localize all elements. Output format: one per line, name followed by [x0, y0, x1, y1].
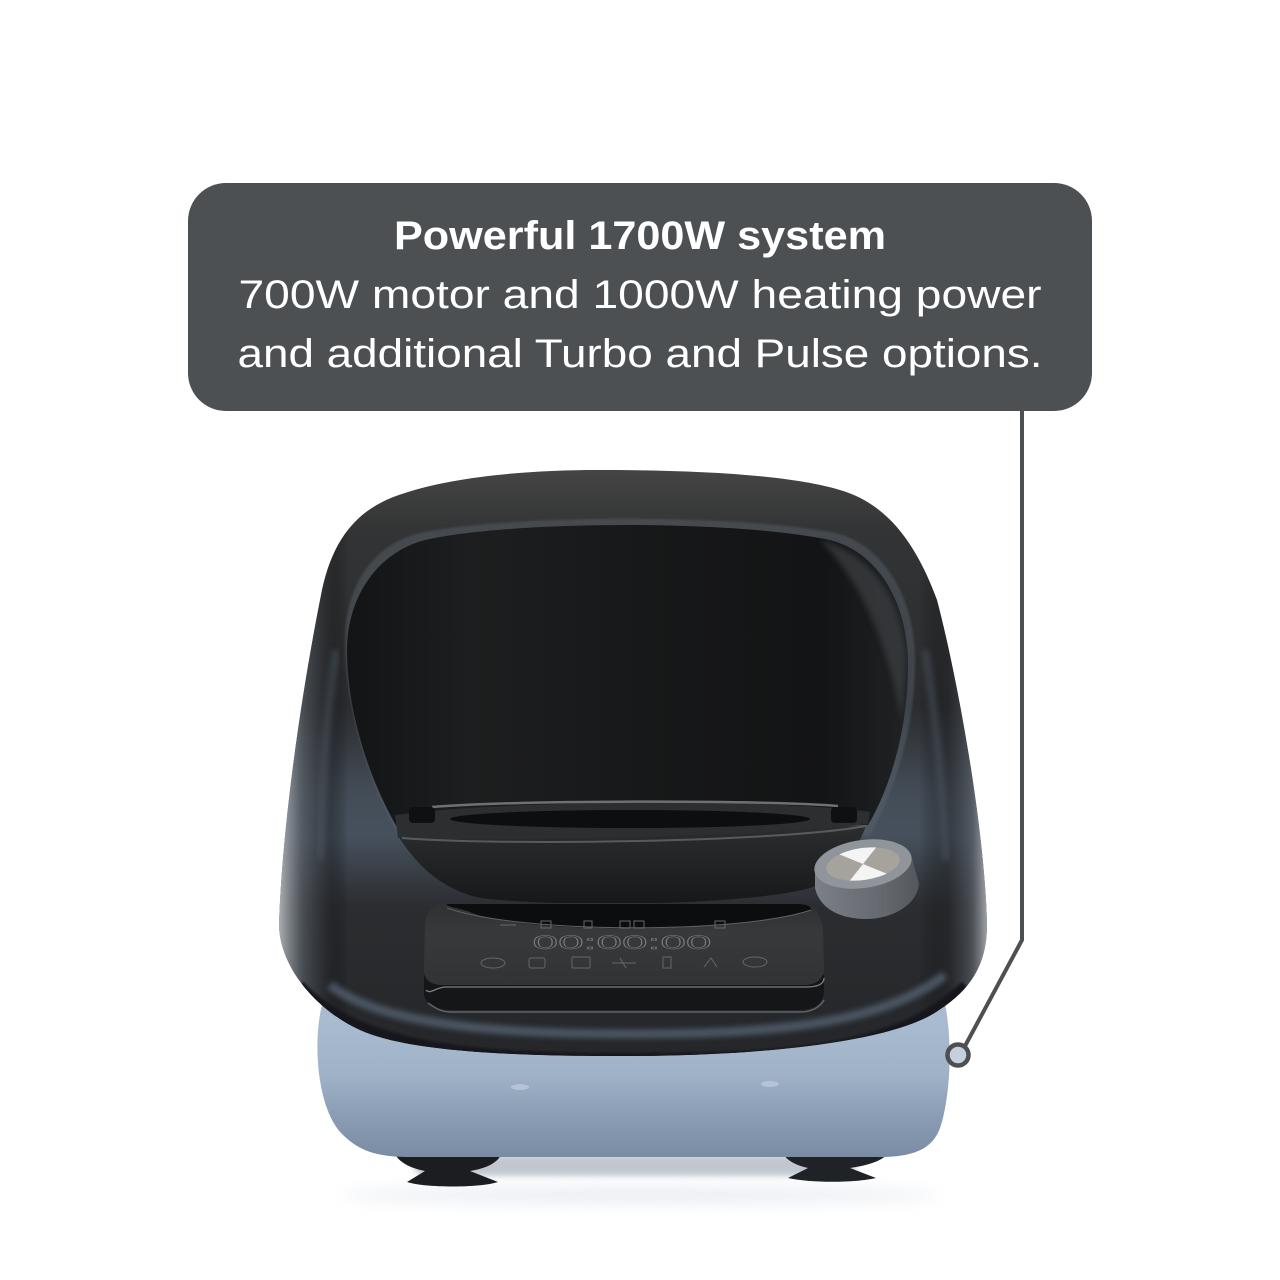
- back cavity: [347, 525, 908, 840]
- underside shadow: [405, 1155, 865, 1176]
- selector knob: [811, 833, 919, 919]
- callout connector line: [948, 411, 1022, 1066]
- product photo: soup maker: [270, 465, 995, 1202]
- heading: Powerful 1700W system: [394, 214, 886, 258]
- body text line 2: and additional Turbo and Pulse options.: [238, 332, 1042, 376]
- timer display: 00:00:00: [532, 933, 712, 954]
- control panel: [424, 903, 824, 1012]
- icon: right foot: [781, 1150, 890, 1182]
- floor shadow: [340, 1188, 940, 1202]
- dark upper shell: [270, 465, 995, 1065]
- icon: left foot: [393, 1150, 503, 1186]
- body text line 1: 700W motor and 1000W heating power: [238, 273, 1042, 317]
- cavity rim highlight: [345, 519, 915, 845]
- icon: callout marker ring: [948, 1044, 968, 1066]
- tray and lid lip: [395, 802, 870, 904]
- light blue base: [317, 1003, 950, 1157]
- display icons: [481, 921, 767, 968]
- callout panel: [188, 183, 1092, 411]
